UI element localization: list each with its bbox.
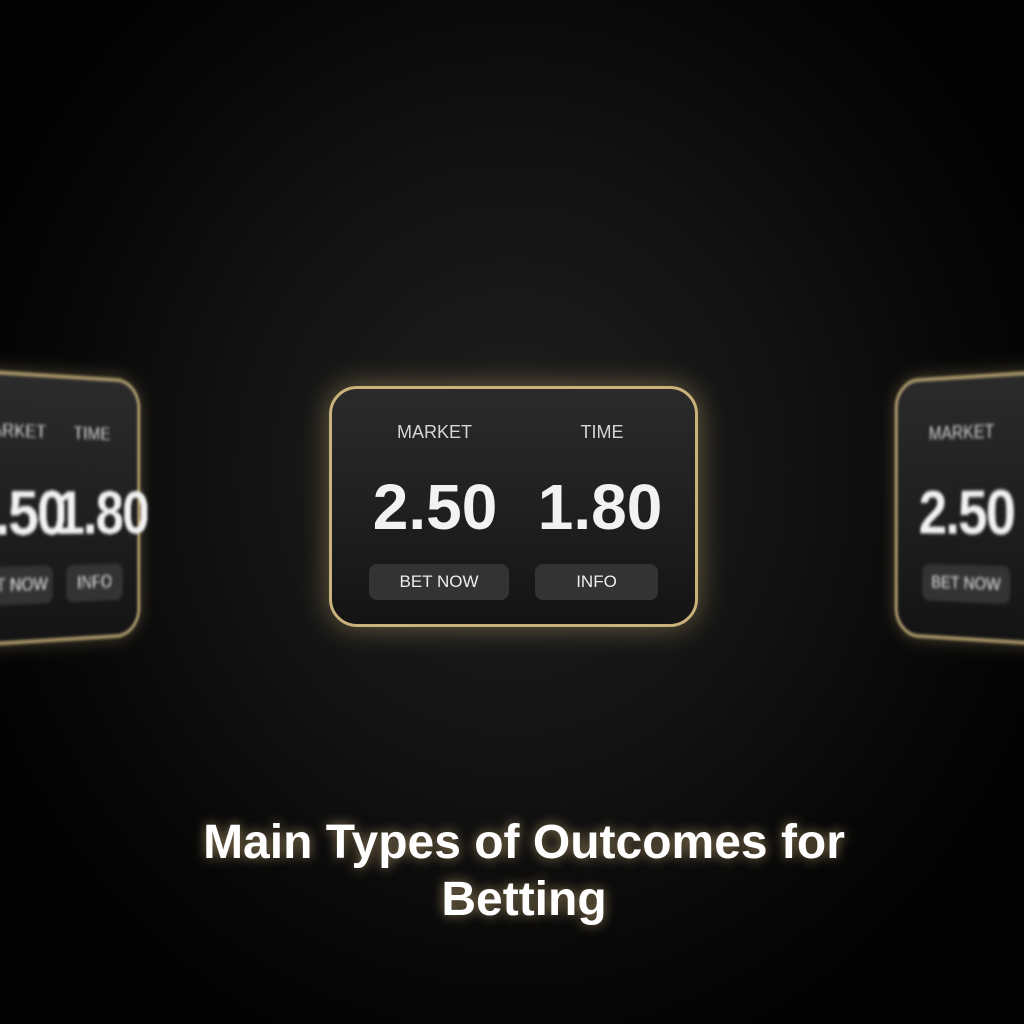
odds 2.50: 2.50 <box>373 471 497 543</box>
title: Betting <box>441 873 607 926</box>
odds 1.80: 1.80 <box>538 471 662 543</box>
button: info: INFO <box>576 572 617 591</box>
left card: INFO <box>77 572 112 593</box>
title <box>198 816 850 932</box>
center card <box>329 386 698 627</box>
label: time: TIME <box>580 422 624 442</box>
right card: 2.50 <box>919 477 1014 548</box>
left card <box>0 360 150 656</box>
button: bet now: BET NOW <box>399 572 479 591</box>
right card <box>887 361 1024 655</box>
label: market: MARKET <box>397 422 472 442</box>
button: bet now <box>369 564 509 600</box>
button: info <box>535 564 658 600</box>
right card: BET NOW <box>931 572 1001 594</box>
right card: MARKET <box>929 421 994 444</box>
left card: 1.80 <box>55 478 148 548</box>
left card: TIME <box>74 422 110 444</box>
title: Main Types of Outcomes for <box>203 816 845 869</box>
